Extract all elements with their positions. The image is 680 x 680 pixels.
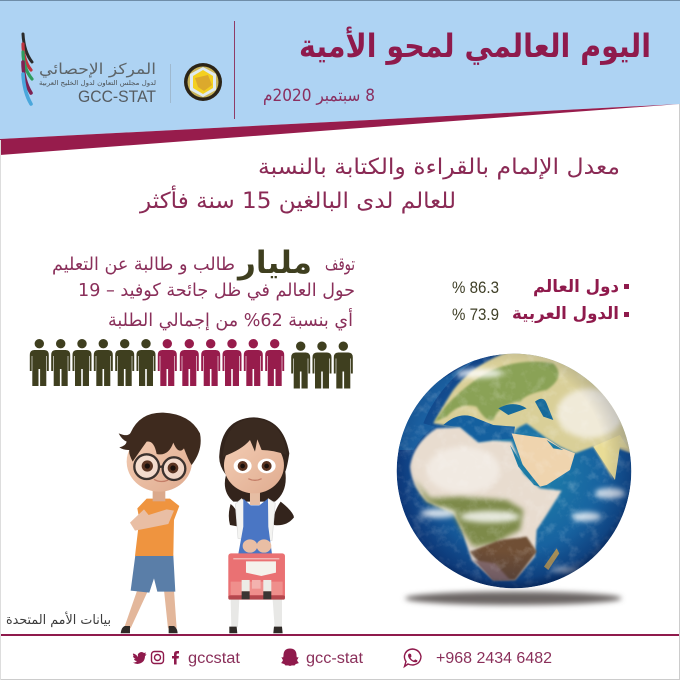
- boy glasses: [134, 454, 185, 480]
- logo Arabic name: المركز الإحصائي: [39, 60, 156, 79]
- boy face: [127, 432, 192, 492]
- logo divider: [170, 64, 171, 103]
- girl legs: [231, 599, 282, 627]
- logo Latin name: GCC-STAT: [78, 87, 156, 106]
- Mediterranean sea: [443, 415, 515, 443]
- icon: facebook: [172, 651, 179, 664]
- girl shoes: [229, 627, 283, 633]
- text block: students: مليار: [236, 245, 312, 281]
- cloud mottling: [393, 350, 637, 593]
- girl sleeves: [235, 499, 275, 541]
- clouds: [420, 369, 625, 572]
- text block: students: [52, 245, 355, 331]
- boy shirt: [135, 499, 179, 556]
- logo Arabic subtitle: لدول مجلس التعاون لدول الخليج العربية: [39, 79, 156, 87]
- girl hair back: [219, 417, 289, 502]
- text block: students: توقف: [325, 254, 355, 275]
- footer line: [0, 634, 680, 636]
- heading line 1: معدل الإلمام بالقراءة والكتابة بالنسبة: [258, 155, 620, 180]
- boy shoes: [121, 626, 178, 633]
- Africa land: [410, 427, 562, 580]
- Madagascar: [544, 548, 559, 570]
- heading line 2: للعالم لدى البالغين 15 سنة فأكثر: [139, 185, 456, 214]
- stat: Arab countries: [452, 304, 629, 324]
- stat: world countries: دول العالم: [533, 277, 619, 297]
- source note: بيانات الأمم المتحدة: [6, 611, 111, 628]
- Southern Africa: [470, 537, 537, 580]
- icon: twitter: [133, 652, 146, 664]
- icon: snapchat: [281, 648, 299, 666]
- text block: students: حول العالم في ظل جائحة كوفيد – 19: [78, 280, 355, 301]
- logo: GCC emblem: [184, 63, 222, 101]
- girl pigtails: [229, 502, 294, 527]
- illustration: boy: [119, 413, 201, 633]
- stat: Arab countries: % 73.9: [452, 305, 499, 324]
- Black Sea and Caspian: [498, 399, 553, 420]
- girl neck and collar: [250, 490, 260, 505]
- boy eyes: [142, 460, 178, 473]
- handle: gccstat: gccstat: [188, 650, 241, 667]
- boy legs: [124, 590, 177, 628]
- date: 8 سبتمبر 2020م: [263, 86, 375, 106]
- girl fringe: [223, 419, 287, 457]
- stat: world countries: % 86.3: [452, 278, 499, 297]
- phone number: +968 2434 6482: [436, 650, 552, 667]
- girl mouth: [248, 479, 262, 480]
- boy neck: [153, 487, 165, 501]
- girl schoolbag: [228, 553, 285, 600]
- globe sphere: [393, 350, 637, 593]
- stat: Arab countries: الدول العربية: [512, 304, 619, 324]
- boy mouth: [154, 479, 168, 482]
- icon: instagram: [152, 652, 164, 664]
- text block: students: طالب و طالبة عن التعليم: [52, 254, 235, 275]
- boy hair: [119, 413, 201, 465]
- girl hands: [243, 539, 257, 553]
- boy shorts: [131, 555, 175, 593]
- header band: [0, 0, 680, 155]
- Eurasia land: [433, 350, 632, 480]
- girl face: [224, 437, 284, 493]
- logo mark: [23, 34, 32, 104]
- Arabia land: [512, 433, 575, 487]
- globe shading: [397, 354, 631, 588]
- Red Sea and Gulf: [510, 440, 563, 487]
- header vertical divider: [234, 21, 235, 119]
- handle: gcc-stat: gcc-stat: [306, 650, 364, 667]
- illustration: girl: [219, 417, 294, 633]
- India: [593, 435, 628, 480]
- North Atlantic: [398, 360, 476, 450]
- stat: world countries: [452, 277, 629, 297]
- girl dress: [238, 499, 272, 554]
- Europe green: [435, 362, 559, 422]
- Africa sahel and congo green: [413, 478, 523, 547]
- illustration: globe: [393, 350, 637, 605]
- pictogram: people row: [30, 339, 353, 388]
- boy arms: [130, 509, 174, 531]
- logo: GCC-STAT: [23, 34, 156, 106]
- icon: whatsapp: [404, 649, 421, 666]
- text block: students: أي بنسبة 62% من إجمالي الطلبة: [108, 308, 353, 331]
- Central Asia pale: [557, 388, 623, 438]
- globe shadow: [405, 592, 622, 605]
- girl eyes: [234, 459, 276, 473]
- footer contacts: [133, 648, 552, 667]
